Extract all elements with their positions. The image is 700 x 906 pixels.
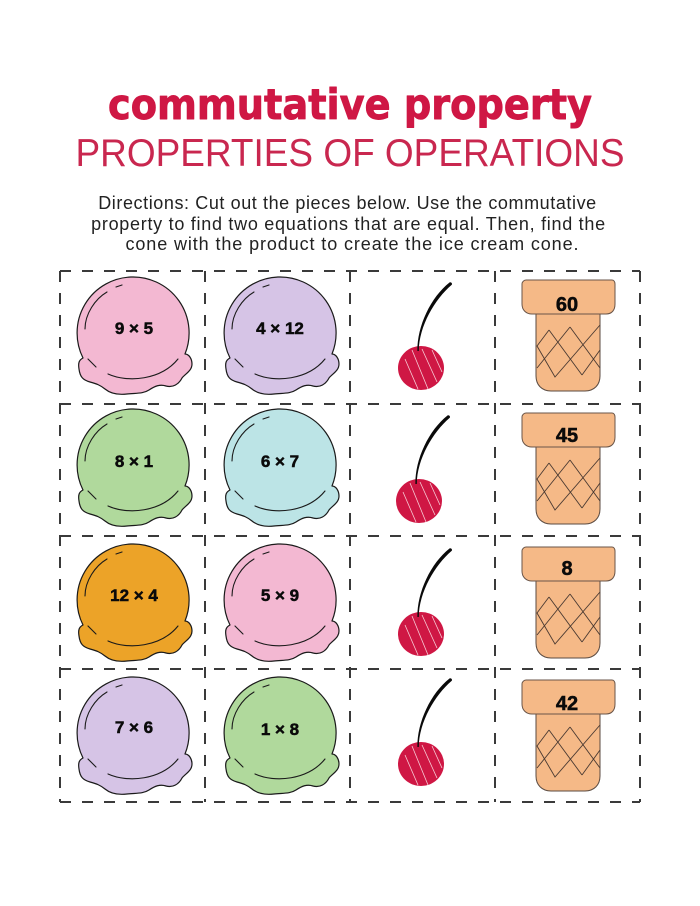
cone: 8: 8 (561, 558, 573, 580)
cone: 45 (522, 413, 615, 524)
cone: 60 (522, 280, 615, 391)
row 2 pieces (77, 409, 615, 526)
cone: 60: 60 (556, 294, 578, 316)
cherry (398, 282, 452, 390)
scoop: 7 x 6 (77, 677, 192, 794)
scoop: 6 x 7 (224, 409, 339, 526)
scoop: 12 x 4: 12 × 4 (110, 586, 158, 605)
scoop: 1 x 8: 1 × 8 (261, 720, 299, 739)
directions text: Directions: Cut out the pieces below. Use the commutative (98, 193, 596, 213)
cherry (396, 415, 450, 523)
row 3 pieces (77, 544, 615, 661)
scoop: 5 x 9: 5 × 9 (261, 586, 299, 605)
scoop: 8 x 1: 8 × 1 (115, 452, 153, 471)
scoop: 5 x 9 (224, 544, 339, 661)
scoop: 4 x 12 (224, 277, 339, 394)
cone: 42 (522, 680, 615, 791)
scoop: 12 x 4 (77, 544, 192, 661)
scoop: 9 x 5 (77, 277, 192, 394)
directions text: property to find two equations that are equal. Then, find the (91, 214, 605, 234)
scoop: 8 x 1 (77, 409, 192, 526)
cone: 45: 45 (556, 425, 578, 447)
row 4 pieces (77, 677, 615, 794)
cone: 8 (522, 547, 615, 658)
subtitle: PROPERTIES OF OPERATIONS (76, 132, 624, 175)
cherry (398, 548, 452, 656)
directions text: cone with the product to create the ice cream cone. (126, 234, 578, 254)
dashed cutting grid (60, 271, 640, 802)
scoop: 1 x 8 (224, 677, 339, 794)
title: commutative property (108, 80, 592, 129)
scoop: 7 x 6: 7 × 6 (115, 718, 153, 737)
scoop: 9 x 5: 9 × 5 (115, 319, 153, 338)
cone: 42: 42 (556, 693, 578, 715)
scoop: 6 x 7: 6 × 7 (261, 452, 299, 471)
cherry (398, 678, 452, 786)
scoop: 4 x 12: 4 × 12 (256, 319, 304, 338)
row 1 pieces (77, 277, 615, 394)
